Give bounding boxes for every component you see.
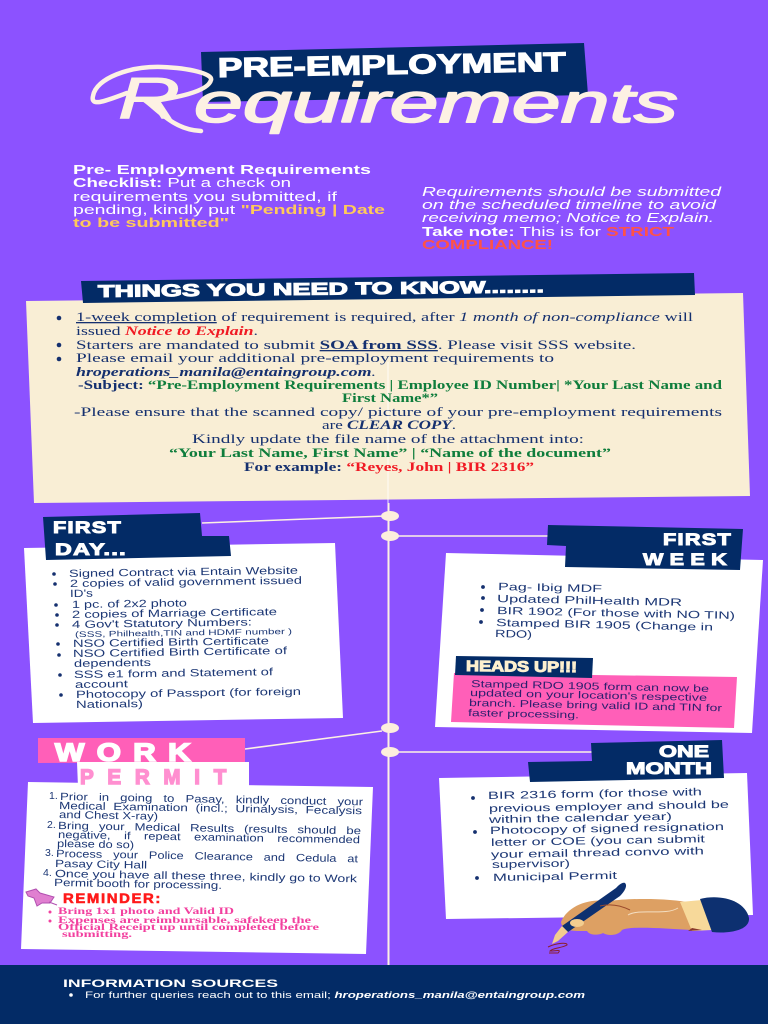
checklist: first week items: BIR 1902 (For those with NO TIN) <box>497 605 735 622</box>
heading: first day: FIRST <box>53 518 122 537</box>
checklist: first day items: (SSS, Philhealth,TIN and HDMF number ) <box>75 627 292 639</box>
callout: heads up: Stamped RDO 1905 form can now be <box>471 679 710 695</box>
heading: first week <box>547 525 743 570</box>
text block: compliance note <box>422 185 723 252</box>
icon: push pin <box>26 889 57 906</box>
checklist: first day items: account <box>75 678 128 691</box>
checklist: one month items: letter or COE (you can submit <box>491 833 705 849</box>
heading: first week: FIRST <box>663 530 732 549</box>
numbered list: work permit steps <box>43 790 364 892</box>
checklist: first week items: Pag- Ibig MDF <box>498 581 602 595</box>
text block: compliance note: Take note: This is for STRICT <box>422 225 675 239</box>
title: equirements <box>194 71 678 134</box>
reminder <box>48 890 319 940</box>
checklist: first day items: SSS e1 form and Statement of <box>74 666 273 681</box>
numbered list: work permit steps: Bring your Medical Results (results should be <box>58 820 361 837</box>
checklist: first day items: 2 copies of Marriage Certificate <box>72 606 277 621</box>
checklist: first week items: Updated PhilHealth MDR <box>497 593 683 609</box>
title: R <box>118 66 180 131</box>
text block: compliance note: receiving memo; Notice to Explain. <box>422 211 714 225</box>
callout: heads up <box>451 656 737 728</box>
bullet list: submission rules: Kindly update the file name of the attachment into: <box>192 431 584 446</box>
checklist: first week items: RDO) <box>495 628 532 641</box>
numbered list: work permit steps: Prior in going to Pasay, kindly conduct your <box>60 791 364 808</box>
checklist: first day items: dependents <box>74 657 151 670</box>
bullet list: submission rules: “Your Last Name, First Name” | “Name of the document” <box>169 445 611 460</box>
bullet list: submission rules: Starters are mandated to submit SOA from SSS . Please visit SSS website. <box>76 337 636 352</box>
numbered list: work permit steps: Process your Police Clearance and Cedula at <box>56 848 358 865</box>
checklist: one month items: BIR 2316 form (for those with <box>488 786 702 802</box>
checklist: one month items: your email thread convo with <box>491 845 704 861</box>
numbered list: work permit steps: 1. <box>49 790 58 802</box>
numbered list: work permit steps: Once you have all these three, kindly go to Work <box>55 868 358 885</box>
reminder: Expenses are reimbursable, safekeep the <box>58 916 311 926</box>
reminder: Official Receipt up until completed before <box>58 923 319 933</box>
footer <box>0 965 768 1024</box>
panel: first day <box>24 513 343 723</box>
checklist: first day items: NSO Certified Birth Certificate <box>73 635 269 650</box>
text block: compliance note: COMPLIANCE! <box>422 238 553 252</box>
checklist: one month items: Photocopy of signed resignation <box>490 821 724 837</box>
checklist: first week items: Stamped BIR 1905 (Change in <box>496 617 713 634</box>
bullet list: submission rules: For example: “Reyes, John | BIR 2316” <box>244 459 534 474</box>
callout: heads up: branch. Please bring valid ID and TIN for <box>469 698 723 714</box>
heading: things you need to know <box>81 273 695 303</box>
title <box>93 43 678 134</box>
checklist: first day items: Photocopy of Passport (for foreign <box>76 686 301 701</box>
heading: one month: MONTH <box>626 759 712 778</box>
checklist: first day items <box>52 565 302 711</box>
bullet list: submission rules: First Name*” <box>342 390 438 405</box>
numbered list: work permit steps: 4. <box>43 867 52 879</box>
checklist: one month items: within the calendar year) <box>487 811 672 826</box>
panel: one month <box>439 740 753 919</box>
checklist: one month items: supervisor) <box>492 858 570 871</box>
heading: first day <box>43 513 231 560</box>
checklist: first day items: Signed Contract via Entain Website <box>69 565 298 580</box>
heading: first day: DAY... <box>55 540 127 559</box>
text block: compliance note: on the scheduled timeline to avoid <box>422 198 718 212</box>
panel: things you need to know <box>26 273 750 503</box>
checklist: one month items: Municipal Permit <box>493 870 617 884</box>
text block: checklist intro: to be submitted" <box>73 216 229 230</box>
numbered list: work permit steps: Medical Examination (incl.; Urinalysis, Fecalysis <box>59 800 362 817</box>
checklist: one month items <box>471 786 729 884</box>
panel: first week <box>435 525 763 733</box>
numbered list: work permit steps: and Chest X-ray) <box>59 809 158 823</box>
checklist: one month items: previous employer and should be <box>489 799 729 815</box>
callout: heads up: faster processing. <box>468 708 579 721</box>
bullet list: submission rules <box>57 309 723 474</box>
text block: checklist intro: requirements you submitted, if <box>73 190 338 204</box>
heading: one month: ONE <box>659 742 709 761</box>
callout: heads up: updated on your location's respective <box>470 688 708 704</box>
title: PRE-EMPLOYMENT <box>218 47 567 83</box>
text block: checklist intro: pending, kindly put "Pending | Date <box>73 203 385 217</box>
checklist: first day items: 4 Gov't Statutory Numbers: <box>72 616 252 631</box>
reminder: submitting. <box>62 930 132 940</box>
numbered list: work permit steps: please do so) <box>57 838 134 851</box>
timeline spine and connectors <box>202 503 592 965</box>
checklist: first day items: 2 copies of valid government issued <box>70 575 302 590</box>
text block: checklist intro: Pre- Employment Requirements <box>73 163 371 177</box>
heading: work permit: PERMIT <box>80 766 240 789</box>
text block: compliance note: Requirements should be submitted <box>422 185 723 199</box>
bullet list: submission rules: -Subject: “Pre-Employment Requirements | Employee ID Number| *Your Last Name and <box>78 377 723 392</box>
numbered list: work permit steps: 3. <box>45 847 54 859</box>
numbered list: work permit steps: 2. <box>47 819 56 831</box>
checklist: first day items: Nationals) <box>76 698 143 711</box>
footer heading: INFORMATION SOURCES <box>63 978 278 990</box>
numbered list: work permit steps: negative, if repeat examination recommended <box>58 829 360 846</box>
checklist: first day items: ID's <box>70 588 93 600</box>
reminder: Bring 1x1 photo and Valid ID <box>58 907 234 917</box>
callout: heads up: HEADS UP!!! <box>466 658 577 676</box>
heading: first week: WEEK <box>643 550 733 569</box>
bullet list: submission rules: are CLEAR COPY . <box>322 417 456 432</box>
heading: one month <box>528 740 724 782</box>
bullet list: submission rules: hroperations_manila@entaingroup.com . <box>76 364 376 379</box>
bullet list: submission rules: Please email your additional pre-employment requirements to <box>76 350 554 365</box>
bullet list: submission rules: -Please ensure that the scanned copy/ picture of your pre-employment requirements <box>74 404 722 419</box>
text block: checklist intro: Checklist: Put a check on <box>73 176 291 190</box>
bullet list: submission rules: 1-week completion of requirement is required, after 1 month of non-compliance will <box>76 309 694 324</box>
reminder: REMINDER: <box>63 890 162 906</box>
icon: hand writing with pen <box>548 883 749 953</box>
heading: work permit: WORK <box>55 739 203 767</box>
numbered list: work permit steps: Permit booth for processing. <box>54 877 222 892</box>
panel: work permit <box>21 738 373 954</box>
text block: checklist intro <box>73 163 385 230</box>
heading: things you need to know: THINGS YOU NEED TO KNOW........ <box>98 277 544 301</box>
bullet list: submission rules: issued Notice to Explain . <box>76 323 258 338</box>
checklist: first day items: 1 pc. of 2x2 photo <box>72 597 187 611</box>
checklist: first week items <box>479 581 735 641</box>
checklist: first day items: NSO Certified Birth Certificate of <box>73 645 287 660</box>
heading: work permit <box>38 738 249 789</box>
footer contact line: For further queries reach out to this email; hroperations_manila@entaingroup.com <box>85 990 586 1001</box>
numbered list: work permit steps: Pasay City Hall <box>55 858 147 872</box>
